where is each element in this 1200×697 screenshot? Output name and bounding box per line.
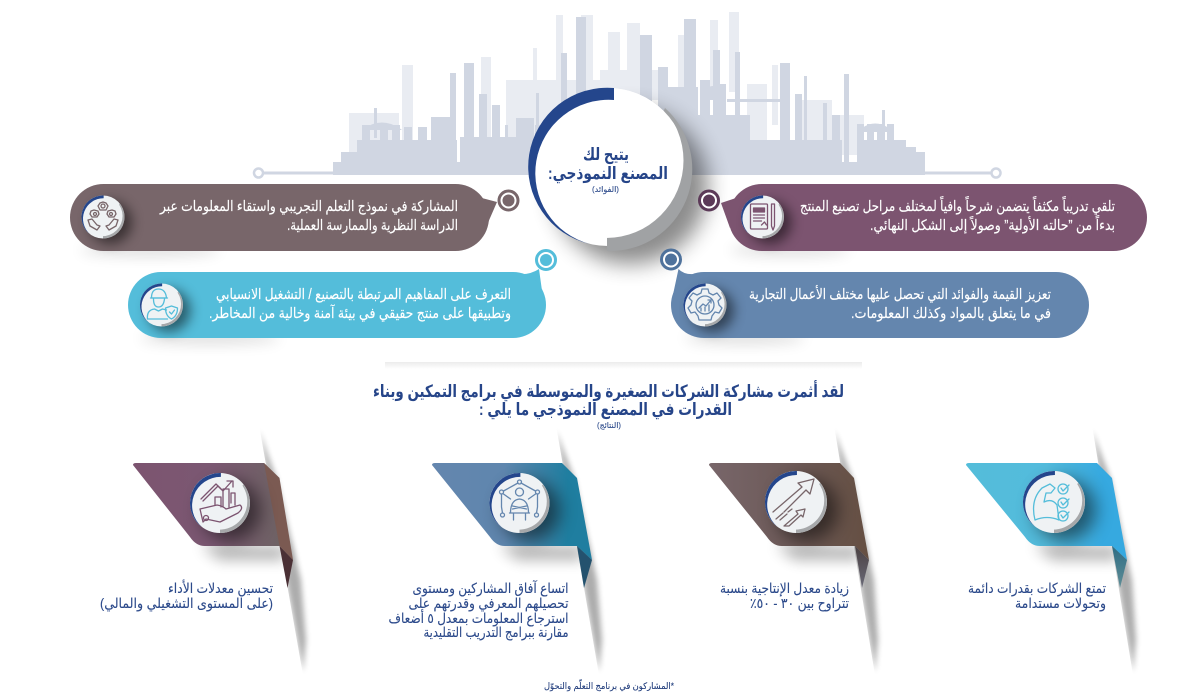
text <box>159 199 458 234</box>
section heading: (النتائج) <box>597 421 621 430</box>
section heading: لقد أثمرت مشاركة الشركات الصغيرة والمتوسطة في برامج التمكين وبناء <box>373 380 844 402</box>
text: تعزيز القيمة والفوائد التي تحصل عليها مختلف الأعمال التجارية <box>749 285 1051 303</box>
text: (على المستوى التشغيلي والمالي) <box>100 595 273 612</box>
text: التعرف على المفاهيم المرتبطة بالتصنيع / التشغيل الانسيابي <box>216 287 511 303</box>
pill: participation in experiential learning <box>70 184 497 256</box>
icon: document book <box>741 195 792 244</box>
text <box>720 580 849 612</box>
result panel: productivity <box>690 425 878 675</box>
text <box>209 287 511 322</box>
central circle shadow <box>552 108 708 264</box>
text <box>968 580 1106 612</box>
text: تلقي تدريباً مكثفاً يتضمن شرحاً وافياً لمختلف مراحل تصنيع المنتج <box>800 196 1115 215</box>
text: اتساع آفاق المشاركين ومستوى <box>412 580 568 597</box>
text: تحسين معدلات الأداء <box>168 579 273 597</box>
result panel: broadened horizons <box>380 425 602 675</box>
icon: gear with chart <box>683 283 734 332</box>
pill: business value <box>671 269 1089 344</box>
text: في ما يتعلق بالمواد وكذلك المعلومات. <box>851 306 1051 322</box>
text: بدءاً من ”حالته الأولية” وصولاً إلى الشكل النهائي. <box>870 215 1115 234</box>
section heading: القدرات في المصنع النموذجي ما يلي : <box>479 400 732 420</box>
blue arc <box>528 88 614 244</box>
icon: safety worker <box>140 283 191 332</box>
icon: gears and hands <box>81 195 132 244</box>
text: مقارنة ببرامج التدريب التقليدية <box>424 624 568 641</box>
ring: teal <box>536 250 556 270</box>
pill: manufacturing concepts <box>128 269 546 344</box>
footnote: *المشاركون في برنامج التعلّم والتحوّل <box>544 679 674 692</box>
icon: muscle and checklist <box>1023 471 1096 541</box>
text: استرجاع المعلومات بمعدل ٥ أضعاف <box>388 609 568 627</box>
circle text: يتيح لك <box>583 145 629 165</box>
text: الدراسة النظرية والممارسة العملية. <box>287 218 458 234</box>
text: المشاركة في نموذج التعلم التجريبي واستقاء المعلومات عبر <box>159 199 458 216</box>
text <box>388 580 569 641</box>
text: تتراوح بين ٣٠ - ٥٠٪ <box>750 595 849 612</box>
factory skyline illustration <box>254 12 1000 178</box>
ring: purple <box>700 191 718 210</box>
ring: brown <box>499 191 518 210</box>
text <box>100 579 273 612</box>
result panel: performance <box>100 425 306 675</box>
circle text: (الفوائد) <box>592 185 619 194</box>
pill: comprehensive training <box>721 184 1147 256</box>
text: تمتع الشركات بقدرات دائمة <box>968 580 1106 597</box>
text <box>800 196 1115 234</box>
text: تحصيلهم المعرفي وقدرتهم على <box>408 595 569 612</box>
ring: blue <box>662 250 680 269</box>
circle text: المصنع النموذجي: <box>548 164 668 184</box>
result panel: sustainable capabilities <box>950 425 1136 675</box>
icon: hand with chart <box>190 473 260 540</box>
central circle <box>528 83 692 251</box>
text: وتطبيقها على منتج حقيقي في بيئة آمنة وخالية من المخاطر. <box>209 304 511 322</box>
icon: rising arrows <box>765 471 838 541</box>
section heading <box>373 380 844 430</box>
text: وتحولات مستدامة <box>1015 595 1106 612</box>
text <box>749 285 1051 322</box>
circle text <box>548 145 668 194</box>
icon: person network <box>489 473 560 540</box>
text: زيادة معدل الإنتاجية بنسبة <box>720 580 849 597</box>
